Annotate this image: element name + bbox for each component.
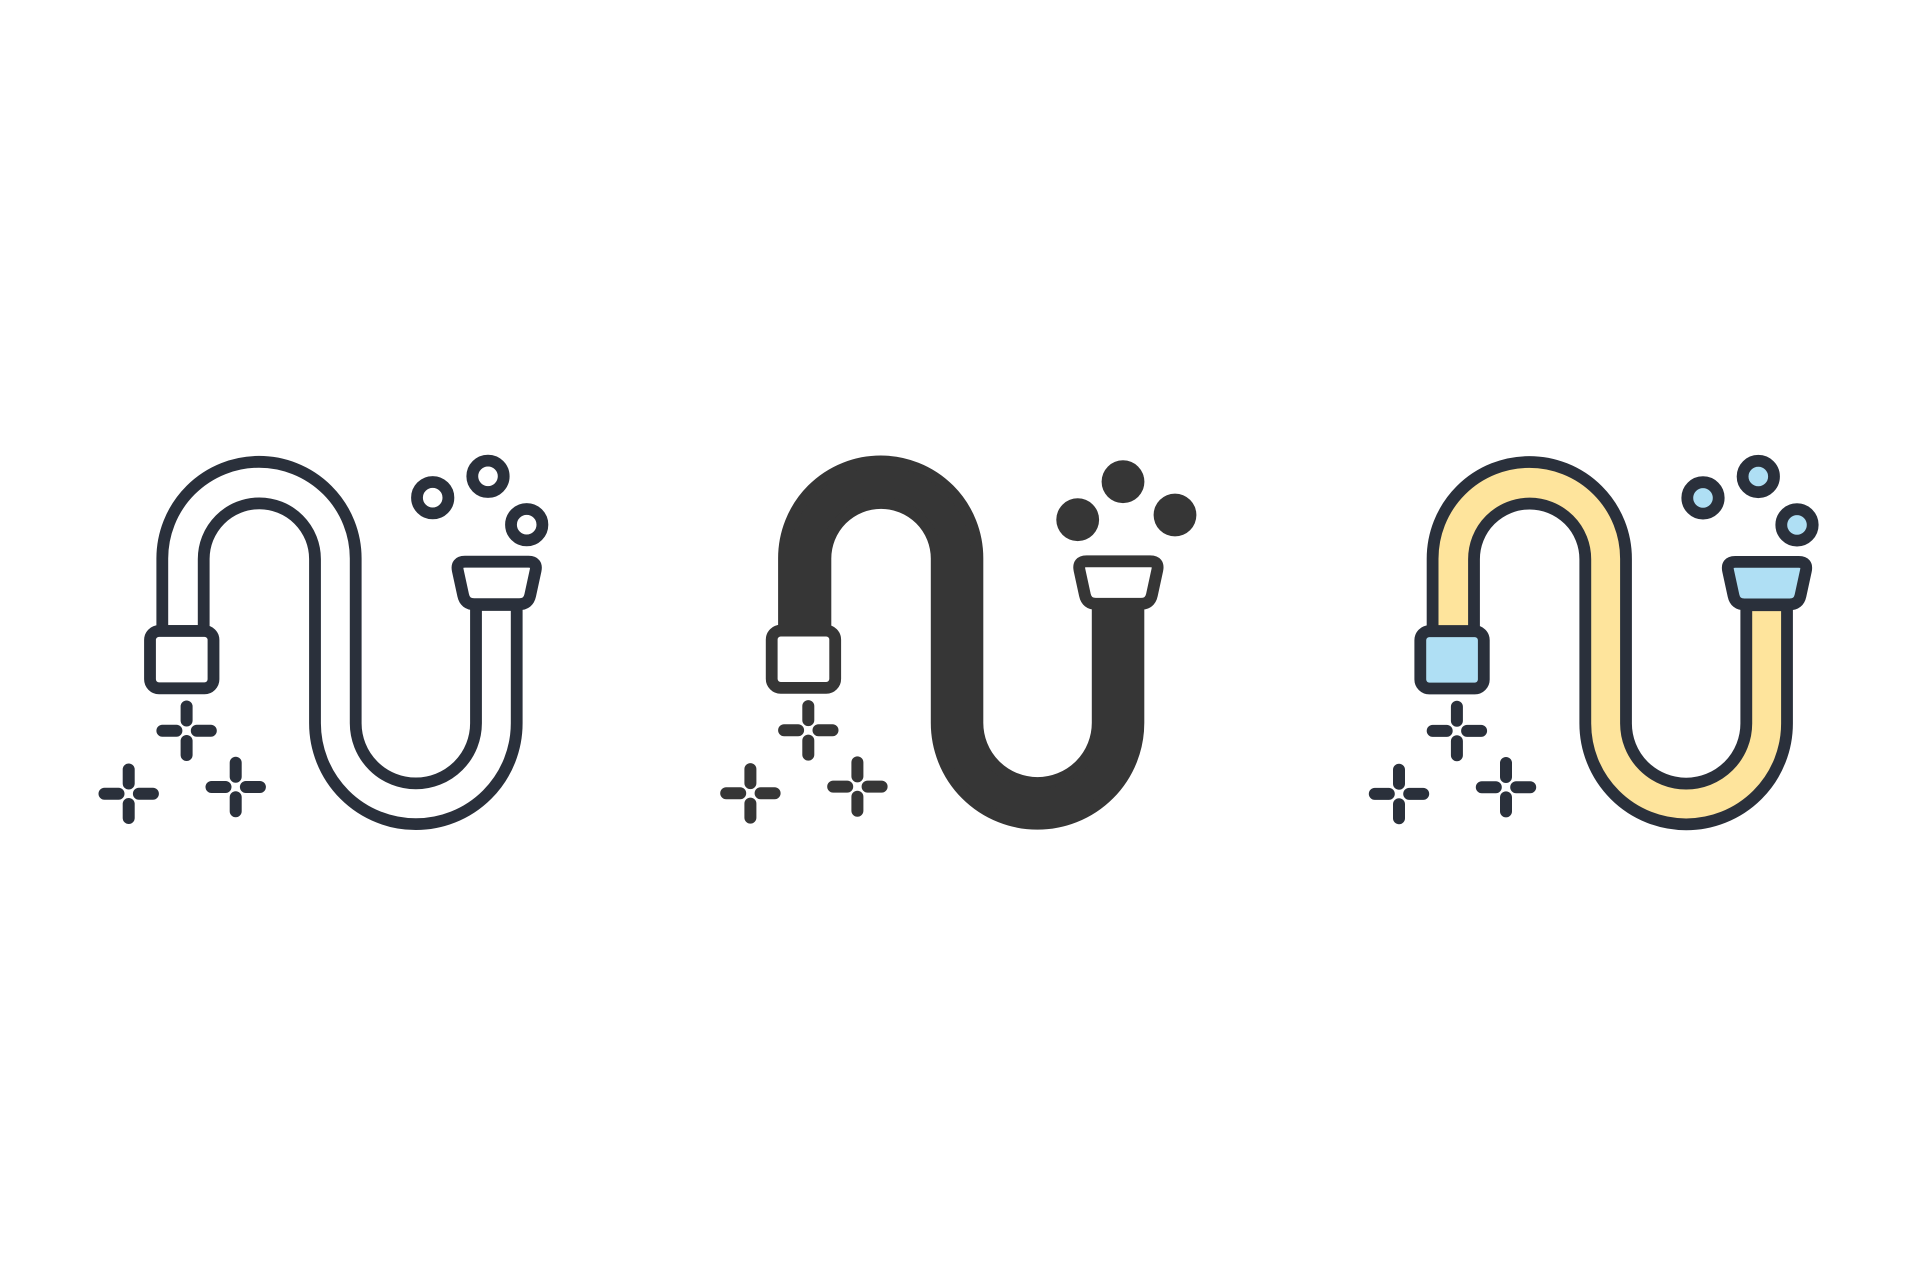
icon: coloured hose [1375, 461, 1813, 824]
sparkles [1375, 707, 1530, 818]
sparkles [104, 706, 260, 818]
icon: outline hose [104, 461, 542, 824]
sparkles [726, 706, 882, 818]
hose tube [1433, 462, 1787, 824]
nozzle [150, 631, 214, 688]
icon: solid hose [726, 460, 1196, 824]
funnel connector [1079, 561, 1158, 604]
funnel connector [457, 562, 536, 604]
bubbles [1056, 460, 1196, 541]
hose tube [162, 462, 517, 824]
bubbles [417, 461, 542, 540]
nozzle [1420, 631, 1484, 688]
hose tube [784, 461, 1138, 824]
funnel connector [1728, 562, 1806, 604]
nozzle [772, 631, 835, 688]
bubbles [1687, 461, 1813, 541]
